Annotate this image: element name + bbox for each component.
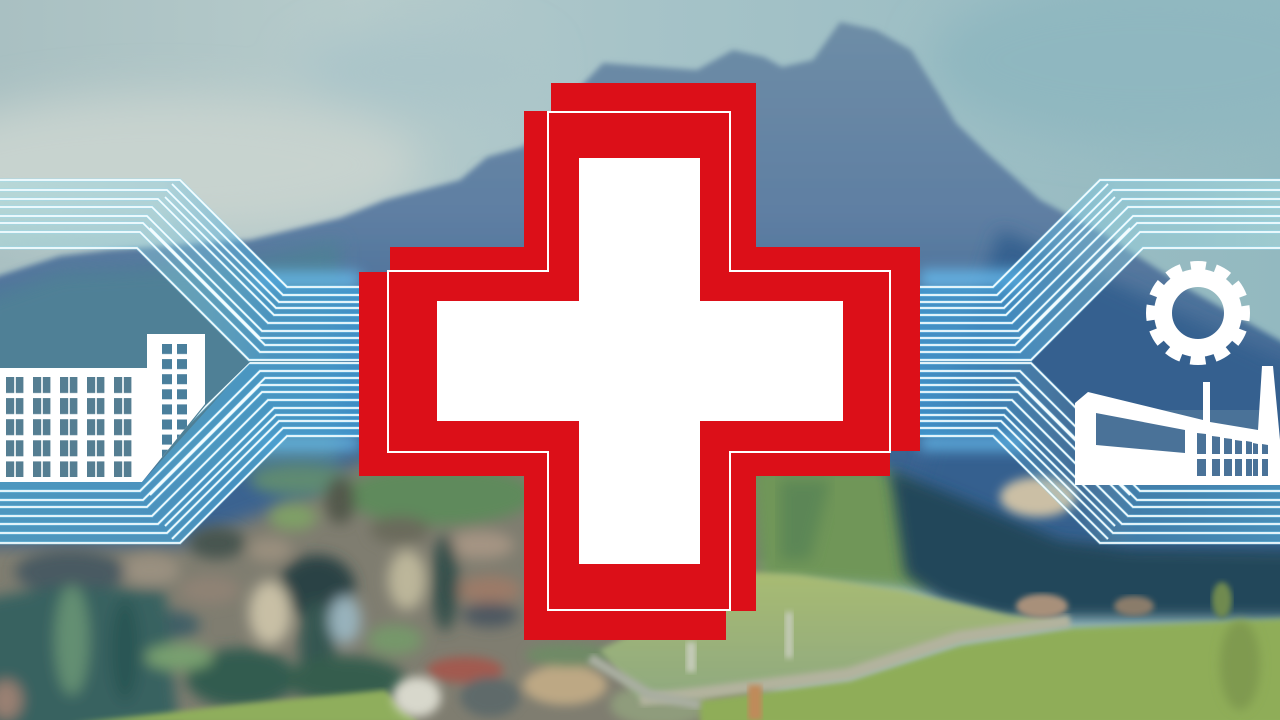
circuit lines: left [0,180,360,543]
Swiss cross emblem [359,83,920,640]
icon: factory [1075,366,1280,485]
white cross [437,158,843,564]
icon: gear [1151,266,1245,360]
red cross, upper-right offset layer [390,83,920,611]
icon: office building [0,334,205,482]
circuit lines: right [920,180,1280,543]
forested foreground: village side [0,460,770,720]
forested foreground: dark hill [750,465,1280,618]
meadow and road [590,572,1280,720]
distant mountain [0,22,1280,560]
thin white outline [388,112,890,610]
red cross, lower-left offset layer [359,111,890,640]
